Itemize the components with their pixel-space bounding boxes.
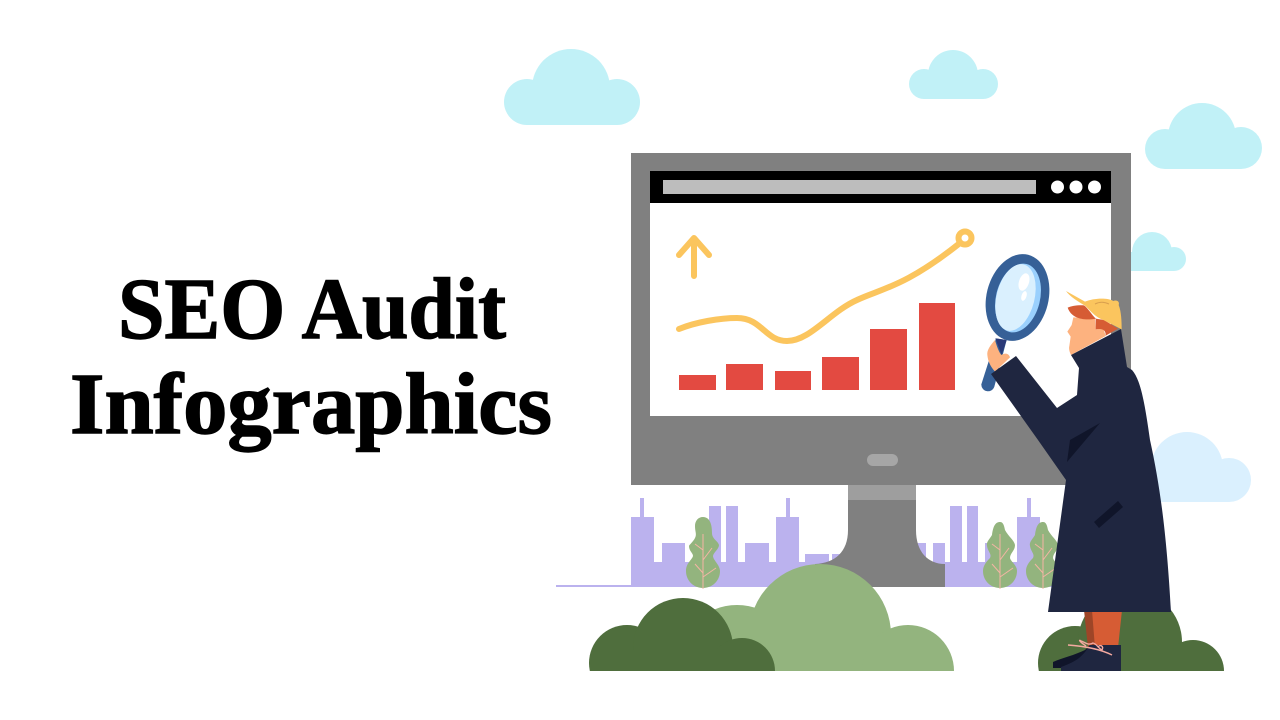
coat (991, 329, 1171, 612)
magnifying glass (977, 247, 1058, 391)
bush: light green (714, 564, 954, 671)
lens frame (977, 247, 1058, 348)
leaf: centre right (983, 522, 1017, 589)
hat (1066, 291, 1122, 329)
monitor (631, 153, 1131, 587)
lens shine (1016, 272, 1032, 292)
hair (1068, 305, 1096, 319)
detective (987, 291, 1171, 671)
front shoe (1061, 645, 1121, 671)
title (70, 260, 552, 452)
leaf: left (686, 517, 720, 589)
coat pocket (1094, 501, 1123, 528)
hat seam (1095, 302, 1109, 304)
browser bar (650, 171, 1111, 203)
monitor frame (631, 153, 1131, 485)
hair back (1096, 319, 1118, 336)
handle (981, 338, 1007, 391)
title: SEO Audit (118, 260, 506, 357)
screen (650, 171, 1111, 416)
trend line (679, 232, 972, 341)
leaf: far right (1026, 522, 1060, 589)
cloud: top centre (909, 50, 998, 100)
front leg (1092, 610, 1122, 648)
bush: dark right (1038, 610, 1224, 671)
title: Infographics (70, 355, 552, 452)
coat fold (1067, 423, 1100, 462)
monitor stand (815, 485, 945, 587)
back leg (1084, 610, 1097, 648)
lens rim (988, 259, 1048, 337)
head (1066, 291, 1122, 355)
monitor button (867, 454, 898, 466)
cloud: top left (504, 49, 640, 127)
bush: dark left (589, 598, 775, 671)
face (1067, 317, 1106, 355)
bar chart (679, 303, 955, 390)
cloud: lower right (1153, 432, 1251, 502)
shoelaces (1068, 640, 1112, 655)
arrow: up (679, 238, 709, 276)
cloud: top right (1145, 103, 1262, 171)
hand (987, 340, 1010, 372)
back shoe (1053, 645, 1100, 668)
city skyline (556, 498, 1060, 587)
lens glass (989, 260, 1042, 335)
cloud: behind monitor (1131, 232, 1186, 271)
